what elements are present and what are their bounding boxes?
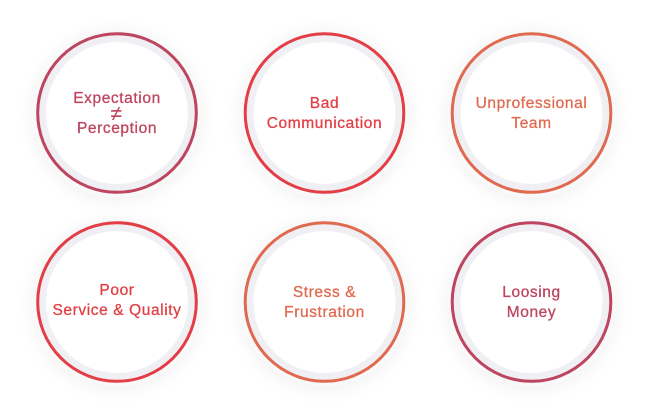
label: loosing money: Loosing — [502, 284, 561, 301]
label: stress and frustration: Stress & — [293, 284, 356, 301]
label: stress and frustration: Frustration — [284, 304, 365, 321]
panel: loosing money — [447, 218, 616, 386]
label: unprofessional team — [476, 95, 587, 132]
panel: stress and frustration — [240, 218, 409, 386]
panel: poor service and quality — [32, 218, 202, 386]
label: bad communication — [267, 95, 382, 132]
panel: unprofessional team — [447, 28, 616, 198]
label: stress and frustration — [284, 284, 365, 321]
label: bad communication: Communication — [267, 115, 382, 132]
label: loosing money — [502, 284, 561, 321]
label: expectation not equal perception: Perception — [77, 120, 157, 137]
label: poor service and quality: Service & Quality — [52, 302, 182, 319]
label: expectation not equal perception: ≠ — [110, 102, 123, 126]
label: unprofessional team: Unprofessional — [476, 95, 587, 112]
label: bad communication: Bad — [310, 95, 339, 112]
label: unprofessional team: Team — [511, 115, 552, 132]
label: poor service and quality: Poor — [99, 282, 135, 299]
label: loosing money: Money — [507, 304, 556, 321]
label: expectation not equal perception — [73, 90, 161, 137]
panel: bad communication — [240, 28, 409, 198]
label: expectation not equal perception: Expectation — [73, 90, 161, 107]
panel: expectation vs perception — [32, 28, 202, 198]
label: poor service and quality — [52, 282, 182, 319]
